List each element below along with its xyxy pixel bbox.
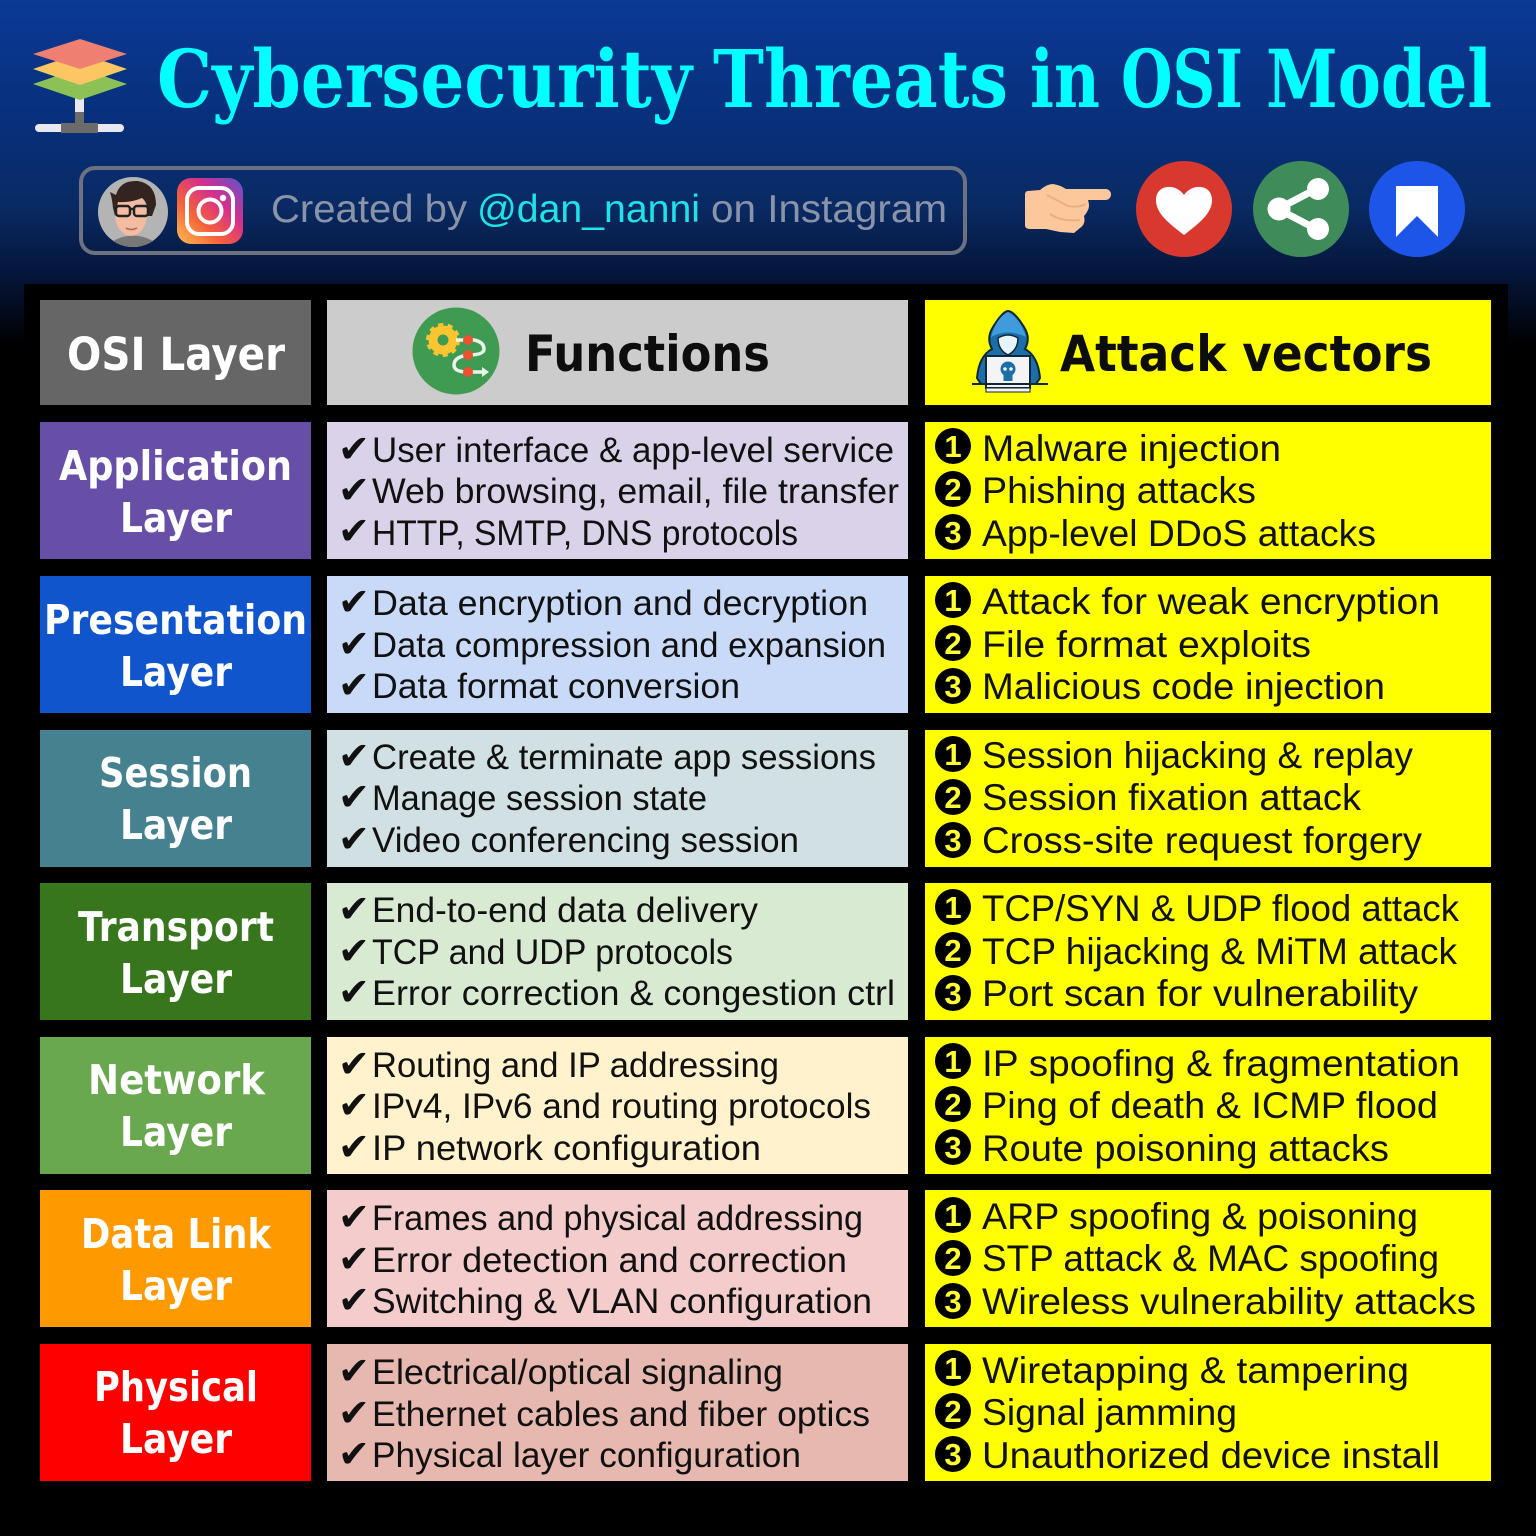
- icon: pointing hand: [1025, 184, 1111, 233]
- functions: HTTP, SMTP, DNS protocols: [372, 514, 798, 553]
- attack vectors: [925, 1344, 1491, 1481]
- attack vectors: Malware injection: [982, 428, 1281, 469]
- attack vectors: 1: [944, 1198, 962, 1233]
- functions: Manage session state: [372, 779, 707, 818]
- functions: [327, 1190, 908, 1327]
- attack vectors: Session hijacking & replay: [982, 735, 1413, 776]
- attack vectors: 3: [944, 1437, 962, 1472]
- functions: [327, 1037, 908, 1174]
- layer label: [40, 1037, 311, 1174]
- functions: Physical layer configuration: [372, 1436, 801, 1475]
- attack vectors: 3: [944, 515, 962, 550]
- row: Physical Layer: [40, 1344, 1491, 1481]
- functions: ✔: [338, 1391, 370, 1435]
- icon: workflow gear: [412, 308, 500, 394]
- layer label: Layer: [120, 1108, 233, 1156]
- layer label: Layer: [120, 1262, 233, 1310]
- title: in: [1030, 32, 1100, 126]
- attack vectors: 2: [944, 472, 962, 507]
- title: Threats: [713, 32, 1008, 126]
- functions: ✔: [338, 1195, 370, 1239]
- attack vectors: TCP hijacking & MiTM attack: [982, 931, 1457, 972]
- layer label: [40, 422, 311, 559]
- layer label: Application: [59, 442, 292, 490]
- icon: like: [1136, 161, 1232, 257]
- attack vectors: 1: [944, 1351, 962, 1386]
- attack vectors: IP spoofing & fragmentation: [982, 1043, 1460, 1084]
- layer label: Transport: [78, 903, 274, 951]
- attack vectors: 3: [944, 1130, 962, 1165]
- row: Session Layer: [40, 730, 1491, 867]
- attack vectors: [925, 1037, 1491, 1174]
- icon: OSI layers stack: [33, 39, 127, 133]
- title: OSI: [1121, 32, 1243, 126]
- header: OSI Layer: OSI Layer: [67, 328, 286, 381]
- functions: ✔: [338, 817, 370, 861]
- functions: Error detection and correction: [372, 1241, 847, 1280]
- functions: ✔: [338, 622, 370, 666]
- header: Attack vectors: Attack vectors: [1060, 325, 1432, 383]
- layer label: Layer: [120, 955, 233, 1003]
- attack vectors: [925, 1190, 1491, 1327]
- functions: ✔: [338, 468, 370, 512]
- credit text: @dan_nanni: [477, 188, 700, 231]
- attack vectors: Ping of death & ICMP flood: [982, 1085, 1438, 1126]
- attack vectors: 1: [944, 1044, 962, 1079]
- header: OSI Layer: [40, 300, 311, 405]
- layer label: [40, 1344, 311, 1481]
- layer label: Data Link: [81, 1210, 272, 1258]
- functions: Ethernet cables and fiber optics: [372, 1395, 870, 1434]
- functions: Error correction & congestion ctrl: [372, 974, 895, 1013]
- attack vectors: Attack for weak encryption: [982, 581, 1440, 622]
- attack vectors: Phishing attacks: [982, 470, 1256, 511]
- attack vectors: 1: [944, 429, 962, 464]
- attack vectors: 3: [944, 976, 962, 1011]
- icon: share: [1253, 161, 1349, 257]
- functions: ✔: [338, 1125, 370, 1169]
- layer label: Layer: [120, 801, 233, 849]
- header: Attack vectors: [925, 300, 1491, 405]
- functions: ✔: [338, 1083, 370, 1127]
- attack vectors: Route poisoning attacks: [982, 1128, 1389, 1169]
- attack vectors: Wireless vulnerability attacks: [982, 1281, 1476, 1322]
- layer label: Presentation: [44, 596, 307, 644]
- functions: [327, 730, 908, 867]
- title: [157, 32, 1492, 126]
- attack vectors: [925, 576, 1491, 713]
- functions: ✔: [338, 1349, 370, 1393]
- attack vectors: [925, 883, 1491, 1020]
- icon: instagram: [177, 178, 243, 244]
- attack vectors: 2: [944, 1394, 962, 1429]
- attack vectors: Signal jamming: [982, 1392, 1237, 1433]
- attack vectors: 3: [944, 1284, 962, 1319]
- row: Network Layer: [40, 1037, 1491, 1174]
- attack vectors: Wiretapping & tampering: [982, 1350, 1409, 1391]
- functions: End-to-end data delivery: [372, 891, 759, 930]
- credit text: [271, 188, 947, 231]
- icon: bookmark: [1369, 161, 1465, 257]
- credit bar: [81, 168, 965, 253]
- functions: Data compression and expansion: [372, 626, 886, 665]
- icon: avatar: [98, 177, 168, 247]
- functions: [327, 422, 908, 559]
- functions: User interface & app-level service: [372, 431, 894, 470]
- attack vectors: File format exploits: [982, 624, 1311, 665]
- functions: Switching & VLAN configuration: [372, 1282, 872, 1321]
- functions: ✔: [338, 929, 370, 973]
- row: Application Layer: [40, 422, 1491, 559]
- functions: ✔: [338, 1237, 370, 1281]
- attack vectors: 3: [944, 669, 962, 704]
- attack vectors: 1: [944, 583, 962, 618]
- attack vectors: 2: [944, 1241, 962, 1276]
- functions: [327, 883, 908, 1020]
- functions: TCP and UDP protocols: [372, 933, 733, 972]
- functions: [327, 1344, 908, 1481]
- layer label: Network: [88, 1056, 267, 1104]
- title: Cybersecurity: [157, 32, 694, 126]
- attack vectors: 2: [944, 780, 962, 815]
- attack vectors: 2: [944, 1087, 962, 1122]
- attack vectors: 2: [944, 933, 962, 968]
- attack vectors: STP attack & MAC spoofing: [982, 1238, 1439, 1279]
- functions: ✔: [338, 970, 370, 1014]
- functions: Create & terminate app sessions: [372, 738, 876, 777]
- functions: ✔: [338, 1042, 370, 1086]
- attack vectors: App-level DDoS attacks: [982, 513, 1376, 554]
- header: Functions: Functions: [525, 325, 770, 383]
- layer label: [40, 576, 311, 713]
- functions: IP network configuration: [372, 1129, 761, 1168]
- credit text: Created by: [271, 188, 468, 231]
- layer label: Layer: [120, 648, 233, 696]
- attack vectors: Unauthorized device install: [982, 1435, 1440, 1476]
- attack vectors: [925, 730, 1491, 867]
- functions: ✔: [338, 509, 370, 553]
- layer label: [40, 1190, 311, 1327]
- attack vectors: Session fixation attack: [982, 777, 1362, 818]
- functions: ✔: [338, 427, 370, 471]
- attack vectors: 2: [944, 626, 962, 661]
- functions: Web browsing, email, file transfer: [372, 472, 899, 511]
- attack vectors: ARP spoofing & poisoning: [982, 1196, 1418, 1237]
- icon: hacker: [972, 311, 1048, 392]
- table panel: [24, 284, 1508, 1536]
- layer label: Layer: [120, 494, 233, 542]
- layer label: Physical: [94, 1363, 258, 1411]
- attack vectors: Port scan for vulnerability: [982, 973, 1419, 1014]
- functions: ✔: [338, 1432, 370, 1476]
- layer label: Session: [99, 749, 252, 797]
- functions: ✔: [338, 887, 370, 931]
- functions: ✔: [338, 734, 370, 778]
- credit text: on Instagram: [711, 188, 947, 231]
- functions: ✔: [338, 663, 370, 707]
- attack vectors: Cross-site request forgery: [982, 820, 1423, 861]
- layer label: [40, 883, 311, 1020]
- functions: IPv4, IPv6 and routing protocols: [372, 1087, 871, 1126]
- row: Presentation Layer: [40, 576, 1491, 713]
- functions: Routing and IP addressing: [372, 1046, 779, 1085]
- functions: Data encryption and decryption: [372, 584, 868, 623]
- row: Data Link Layer: [40, 1190, 1491, 1327]
- layer label: Layer: [120, 1415, 233, 1463]
- attack vectors: 3: [944, 823, 962, 858]
- attack vectors: TCP/SYN & UDP flood attack: [982, 888, 1459, 929]
- functions: Data format conversion: [372, 667, 740, 706]
- functions: ✔: [338, 580, 370, 624]
- functions: ✔: [338, 1278, 370, 1322]
- row: Transport Layer: [40, 883, 1491, 1020]
- layer label: [40, 730, 311, 867]
- functions: ✔: [338, 775, 370, 819]
- functions: [327, 576, 908, 713]
- attack vectors: Malicious code injection: [982, 666, 1385, 707]
- functions: Frames and physical addressing: [372, 1199, 863, 1238]
- functions: Video conferencing session: [372, 821, 799, 860]
- attack vectors: [925, 422, 1491, 559]
- functions: Electrical/optical signaling: [372, 1353, 783, 1392]
- attack vectors: 1: [944, 737, 962, 772]
- attack vectors: 1: [944, 890, 962, 925]
- header: Functions: [327, 300, 908, 405]
